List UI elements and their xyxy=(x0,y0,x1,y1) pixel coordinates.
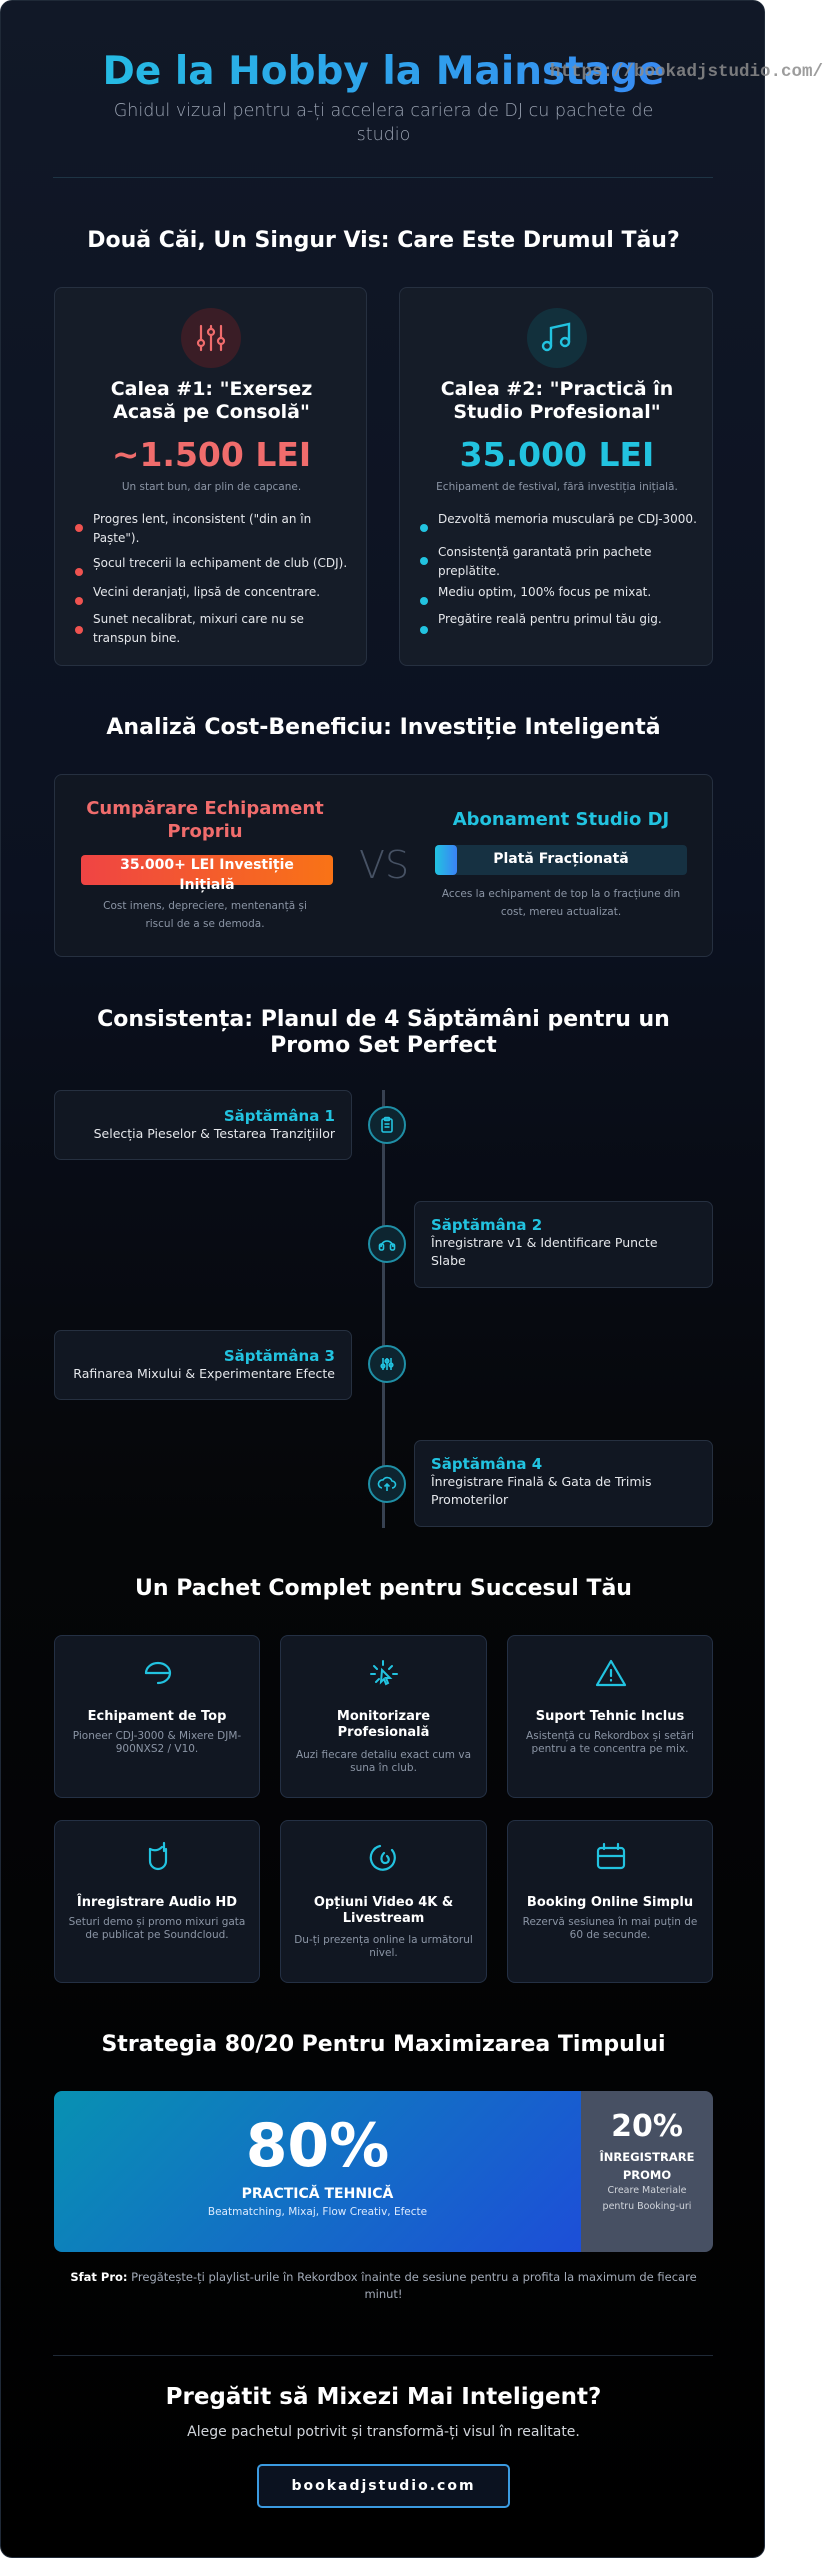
icon: music note xyxy=(527,308,587,368)
bullets path 1: Vecini deranjați, lipsă de concentrare. xyxy=(93,585,320,599)
week 2 xyxy=(414,1201,713,1288)
feature: equipment: Echipament de Top xyxy=(88,1709,226,1724)
80% segment: PRACTICĂ TEHNICĂ xyxy=(242,2186,393,2202)
heading: package: Un Pachet Complet pentru Succesul Tău xyxy=(135,1576,632,1601)
right option: Acces la echipament de top la o fracțiune din cost, mereu actualizat. xyxy=(442,888,680,918)
bullets path 2: Pregătire reală pentru primul tău gig. xyxy=(438,612,662,626)
right option: Abonament Studio DJ xyxy=(453,809,669,830)
week 1: Selecția Pieselor & Testarea Tranzițiilor xyxy=(94,1126,335,1141)
week 4: Săptămâna 4 xyxy=(431,1455,542,1473)
right option: Plată Fracționată xyxy=(493,851,629,867)
bullets path 1: Șocul trecerii la echipament de club (CDJ). xyxy=(93,556,347,570)
icon: upload cloud xyxy=(368,1465,406,1503)
icon: sliders xyxy=(181,308,241,368)
bullets path 2 xyxy=(420,512,697,634)
bullets path 2: Mediu optim, 100% focus pe mixat. xyxy=(438,585,651,599)
heading: cost-benefit: Analiză Cost-Beneficiu: Investiție Inteligentă xyxy=(106,715,661,740)
left option: Inițială xyxy=(179,877,235,893)
heading: two paths: Două Căi, Un Singur Vis: Care Este Drumul Tău? xyxy=(87,228,680,253)
20% segment xyxy=(581,2091,713,2252)
bullets path 1: Sunet necalibrat, mixuri care nu se transpun bine. xyxy=(93,612,304,645)
feature: video: Livestream xyxy=(343,1911,424,1926)
week 4 xyxy=(414,1440,713,1527)
week 2: Înregistrare v1 & Identificare Puncte Slabe xyxy=(431,1235,658,1268)
path 1 title: Acasă pe Consolă" xyxy=(113,401,310,423)
80% segment: 80% xyxy=(246,2111,389,2181)
path 2 title: Calea #2: "Practică în xyxy=(441,378,673,400)
panel: path 1 xyxy=(54,287,367,666)
week 2: Săptămâna 2 xyxy=(431,1216,542,1234)
heading: 80/20: Strategia 80/20 Pentru Maximizarea Timpului xyxy=(101,2032,666,2057)
CTA button xyxy=(257,2464,510,2508)
feature: support: Asistență cu Rekordbox și setări pentru a te concentra pe mix. xyxy=(526,1730,694,1755)
icon: sliders xyxy=(368,1345,406,1383)
week 3 xyxy=(54,1330,352,1400)
panel: path 2 xyxy=(399,287,713,666)
20% segment: Creare Materiale pentru Booking-uri xyxy=(603,2185,691,2212)
20% segment: ÎNREGISTRARE xyxy=(600,2150,694,2164)
feature: booking xyxy=(507,1820,713,1983)
feature: monitoring xyxy=(280,1635,487,1798)
left option: 35.000+ LEI Investiție xyxy=(120,857,294,873)
path 1 title: Calea #1: "Exersez xyxy=(111,378,312,400)
CTA button: bookadjstudio.com xyxy=(291,2478,476,2494)
panel: cost comparison xyxy=(54,774,713,957)
feature: audio: Seturi demo și promo mixuri gata de publicat pe Soundcloud. xyxy=(69,1916,245,1941)
bullets path 2: Dezvoltă memoria musculară pe CDJ-3000. xyxy=(438,512,697,526)
bullets path 1: Progres lent, inconsistent ("din an în Paște"). xyxy=(93,512,311,545)
feature: video xyxy=(280,1820,487,1983)
week 3: Rafinarea Mixului & Experimentare Efecte xyxy=(73,1366,335,1381)
week 4: Înregistrare Finală & Gata de Trimis Promoterilor xyxy=(431,1474,652,1507)
feature: video: Opțiuni Video 4K & xyxy=(314,1895,453,1910)
icon: headphones xyxy=(368,1225,406,1263)
feature grid xyxy=(54,1635,713,1983)
bullets path 1 xyxy=(75,512,347,645)
subtitle: Ghidul vizual pentru a-ți accelera cariera de DJ cu pachete de studio xyxy=(114,101,653,145)
feature: support: Suport Tehnic Inclus xyxy=(536,1709,684,1724)
path 1 price: ~1.500 LEI xyxy=(112,435,311,474)
20% segment: PROMO xyxy=(623,2168,671,2182)
VS label: VS xyxy=(359,843,409,887)
heading: 4 week plan: Consistența: Planul de 4 Săptămâni pentru un Promo Set Perfect xyxy=(97,1007,670,1058)
80% segment: Beatmatching, Mixaj, Flow Creativ, Efecte xyxy=(208,2206,427,2218)
feature: video: Du-ți prezența online la următorul nivel. xyxy=(294,1934,473,1959)
pro tip: Sfat Pro: Pregătește-ți playlist-urile în Rekordbox înainte de sesiune pentru a profita la maximum de fiecare minut! xyxy=(70,2270,697,2301)
CTA subtitle: Alege pachetul potrivit și transformă-ți visul în realitate. xyxy=(187,2424,580,2440)
panel: path 1: Un start bun, dar plin de capcane. xyxy=(122,481,301,493)
panel: path 2: Echipament de festival, fără investiția inițială. xyxy=(436,481,678,493)
feature: audio xyxy=(54,1820,260,1983)
icon: clipboard xyxy=(368,1106,406,1144)
week 1: Săptămâna 1 xyxy=(224,1107,335,1125)
chart: 80/20 bar xyxy=(54,2091,713,2252)
week 1 xyxy=(54,1090,352,1160)
path 1 title xyxy=(111,378,312,423)
timeline xyxy=(54,1090,713,1528)
title: De la Hobby la Mainstage xyxy=(102,49,664,94)
path 2 title xyxy=(441,378,673,423)
path 2 price: 35.000 LEI xyxy=(460,435,654,474)
feature: monitoring: Profesională xyxy=(338,1725,429,1740)
left option: Cumpărare Echipament Propriu xyxy=(86,798,324,842)
right option xyxy=(435,809,687,918)
feature: monitoring: Auzi fiecare detaliu exact cum va suna în club. xyxy=(296,1749,471,1774)
path 2 title: Studio Profesional" xyxy=(453,401,661,423)
20% segment: 20% xyxy=(611,2109,683,2144)
bullets path 2: Consistență garantată prin pachete preplătite. xyxy=(438,545,651,578)
feature: equipment: Pioneer CDJ-3000 & Mixere DJM-900NXS2 / V10. xyxy=(73,1730,241,1755)
feature: equipment xyxy=(54,1635,260,1798)
feature: audio: Înregistrare Audio HD xyxy=(77,1895,237,1910)
week 3: Săptămâna 3 xyxy=(224,1347,335,1365)
80% segment xyxy=(54,2091,581,2252)
url watermark: https://bookadjstudio.com/ xyxy=(550,62,823,82)
feature: support xyxy=(507,1635,713,1798)
feature: booking: Rezervă sesiunea în mai puțin de 60 de secunde. xyxy=(523,1916,697,1941)
CTA heading: Pregătit să Mixezi Mai Inteligent? xyxy=(166,2384,601,2410)
feature: monitoring: Monitorizare xyxy=(337,1709,430,1724)
left option xyxy=(81,798,333,930)
feature: booking: Booking Online Simplu xyxy=(527,1895,693,1910)
left option: Cost imens, depreciere, mentenanță și riscul de a se demoda. xyxy=(103,900,307,930)
